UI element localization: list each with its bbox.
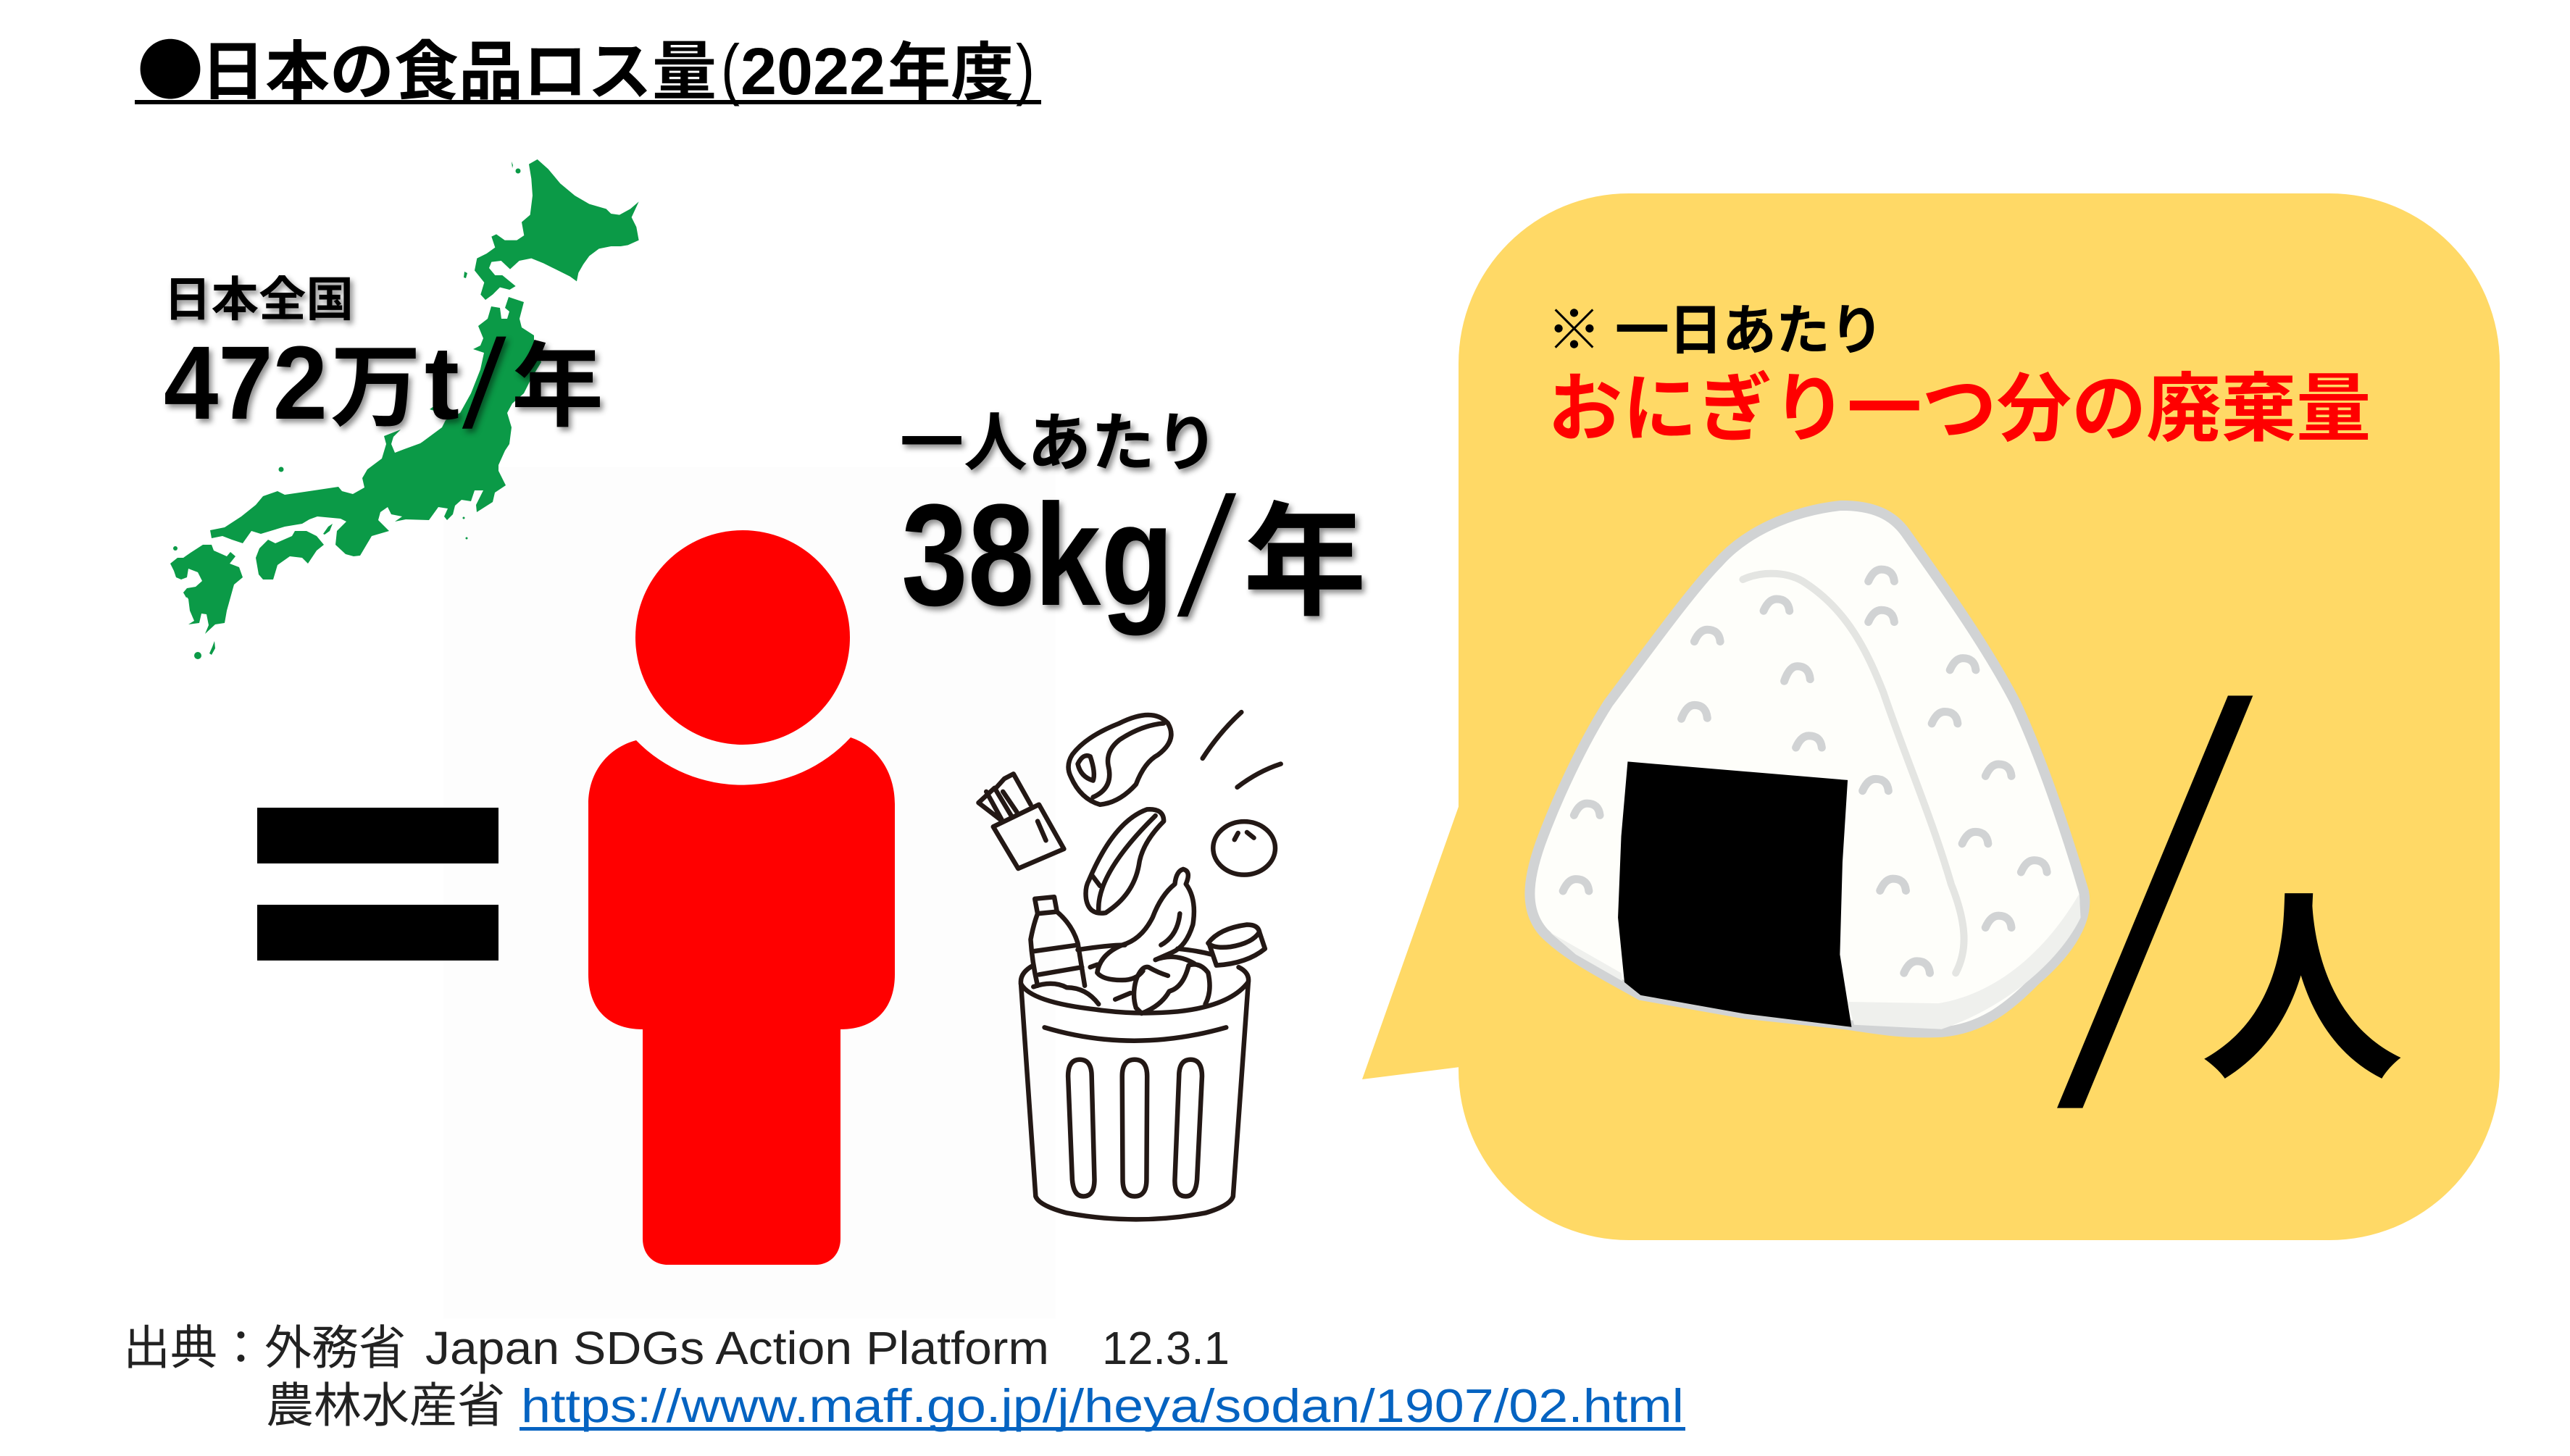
map of Japan [170,159,639,659]
fish fillet [1086,809,1164,913]
icon: red person [588,530,895,1265]
value: 38kg/年: 年 [1243,494,1367,632]
lid [1208,925,1265,966]
Hokkaido [475,159,639,300]
source citation: 出典：外務省 [123,1321,406,1374]
fries [979,774,1064,869]
source citation [123,1321,1685,1432]
title: ( [721,30,740,106]
icon: onigiri rice ball [1530,506,2085,1032]
equals sign [257,808,498,961]
value: 38kg/年: / [1171,463,1242,650]
title: ) [1016,30,1035,106]
nori seaweed [1618,761,1851,1027]
value: 472万t/年: 472 [164,325,327,441]
label: Japan total: 日本全国 [164,273,354,326]
value: 472万t/年: 年 [512,335,604,438]
value: 472万t/年: 万 [330,338,421,438]
label: per day: ※ 一日あたり [1547,300,1884,361]
source citation: 農林水産省 [266,1378,505,1432]
heading: one rice ball: おにぎり一つ分の廃棄量 [1548,367,2371,451]
source citation: Japan SDGs Action Platform [425,1322,1049,1374]
round food [1213,821,1275,875]
bottle [1030,897,1085,986]
motion lines [1203,712,1281,787]
icon: trash can with food [979,712,1281,1219]
value: 38kg/年 [901,463,1367,650]
title: 日本の食品ロス量 [201,35,717,108]
title [135,17,1041,114]
source citation: 12.3.1 [1102,1322,1230,1374]
per-person slash: / [2028,595,2280,1222]
banana and scraps [1033,869,1210,1013]
value: 38kg/年: 38kg [901,474,1174,636]
Honshu [210,297,541,556]
title: 2022 [740,35,885,109]
Kyushu [170,545,243,634]
can [1021,945,1248,1219]
label: per person: 一人あたり [900,407,1219,479]
value: 472万t/年: / [459,314,509,454]
small islands [173,162,513,655]
panel: speech bubble [1362,193,2500,1240]
value: 472万t/年: t [425,325,459,441]
title: 年度 [888,38,1014,108]
meat [1069,715,1171,805]
rice grains [1563,569,2047,973]
per-person character: 人 [2200,877,2404,1105]
source link: https://www.maff.go.jp/j/heya/sodan/1907/02.html [521,1379,1684,1432]
Shikoku [256,531,324,580]
value: 472万t/年 [164,314,604,454]
title: ● [137,17,204,114]
